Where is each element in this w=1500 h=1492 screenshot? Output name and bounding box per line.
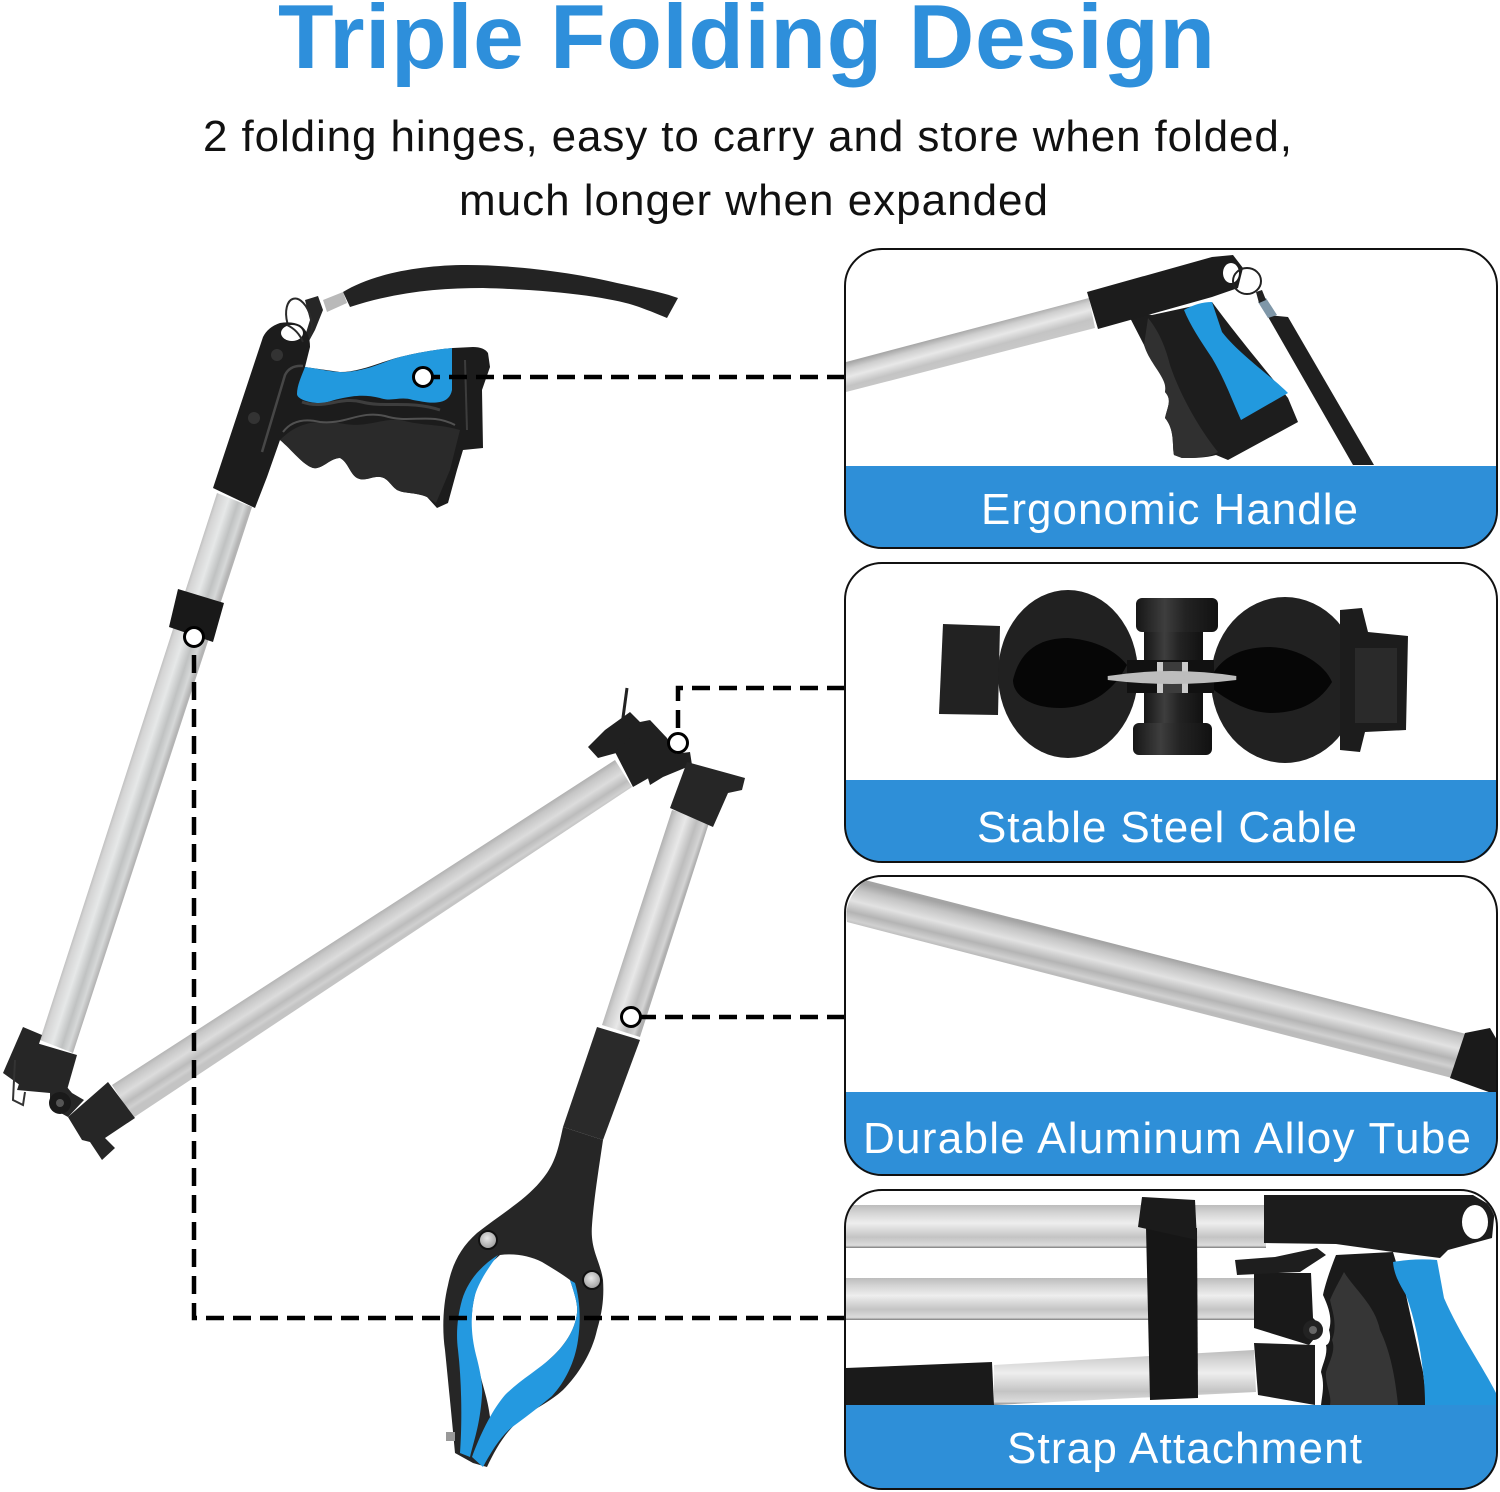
hinge: top right <box>588 688 745 827</box>
grabber head <box>443 1027 640 1467</box>
panel 1 photo: handle <box>846 255 1374 465</box>
dashed callout lines <box>194 377 845 1318</box>
tube: upper section <box>40 493 252 1053</box>
panel 2 label: Stable Steel Cable <box>977 803 1357 852</box>
panel 4 photo: folded tubes and strap <box>846 1195 1496 1405</box>
handle <box>213 322 490 508</box>
panel 2 photo: hinge with cable <box>939 590 1408 763</box>
subtitle: much longer when expanded <box>459 176 1048 225</box>
product illustration: folded reacher grabber <box>3 265 745 1467</box>
panel 4 caption bar <box>846 1405 1496 1488</box>
subtitle <box>203 112 1292 225</box>
callout marker dots <box>184 368 688 1026</box>
panel 1 outline <box>845 249 1497 548</box>
panel 3 caption bar <box>846 1092 1496 1174</box>
tube: lower section <box>602 810 710 1037</box>
panel 3 photo: tube <box>846 880 1496 1092</box>
panel 4 outline <box>845 1190 1497 1489</box>
velcro band on tube <box>169 589 224 642</box>
panel 3 label: Durable Aluminum Alloy Tube <box>863 1114 1471 1163</box>
subtitle: 2 folding hinges, easy to carry and store when folded, <box>203 112 1292 161</box>
hinge: bottom left <box>3 1027 135 1160</box>
panel 2 caption bar <box>846 780 1496 861</box>
wrist strap <box>282 265 678 344</box>
panel 3 outline <box>845 876 1497 1175</box>
panel: strap attachment <box>845 1190 1497 1490</box>
panel 4 label: Strap Attachment <box>1007 1424 1362 1473</box>
panel: durable aluminum alloy tube <box>845 876 1497 1176</box>
panel: stable steel cable <box>845 563 1497 863</box>
panel 1 label: Ergonomic Handle <box>981 485 1358 534</box>
panel 2 outline <box>845 563 1497 862</box>
panel 1 caption bar <box>846 466 1496 547</box>
panel: ergonomic handle <box>845 249 1497 549</box>
tube: middle section <box>112 760 632 1118</box>
